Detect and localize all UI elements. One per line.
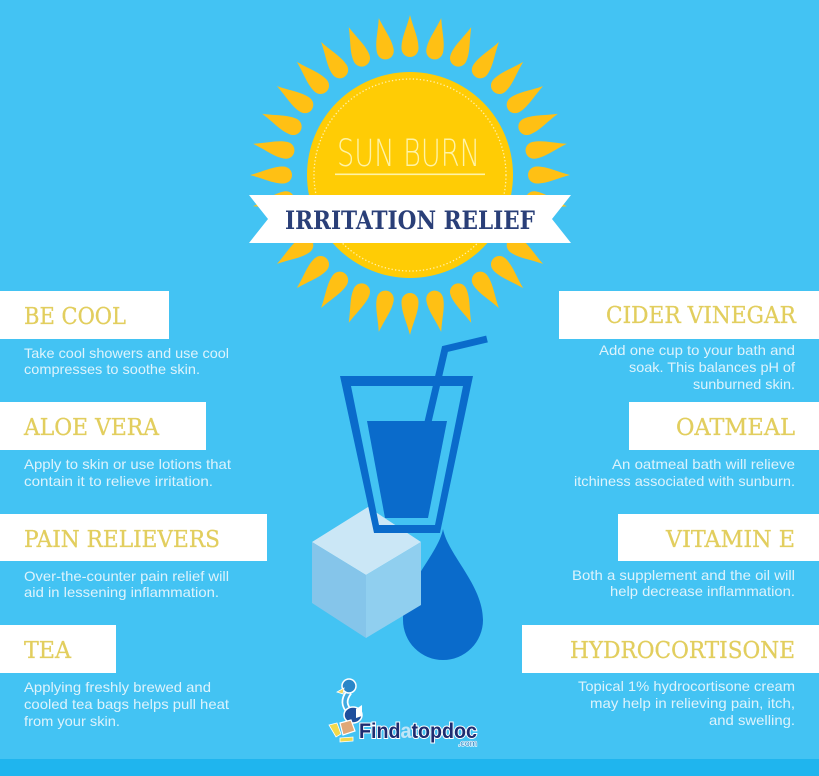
panel: hydrocortisone: HYDROCORTISONE (570, 636, 795, 664)
panel: be cool: BE COOL (24, 302, 126, 330)
panel: vitamin e (572, 514, 819, 599)
panel: hydrocortisone (522, 625, 819, 728)
liquid (367, 421, 447, 518)
panel: be cool: compresses to soothe skin. (24, 361, 200, 377)
icon: sun (250, 15, 570, 335)
panel: vitamin e: help decrease inflammation. (610, 583, 795, 599)
banner: irritation relief (249, 195, 571, 243)
panel: tea: cooled tea bags helps pull heat (24, 696, 229, 712)
panel: aloe vera: Apply to skin or use lotions that (24, 456, 231, 472)
panel: aloe vera: contain it to relieve irritation. (24, 473, 213, 489)
panel: cider vinegar: CIDER VINEGAR (606, 301, 797, 329)
title: sun burn: SUN BURN (337, 132, 480, 175)
panel: cider vinegar: sunburned skin. (693, 376, 795, 392)
panel: oatmeal: OATMEAL (676, 413, 795, 441)
panel: cider vinegar: Add one cup to your bath and (599, 342, 795, 358)
panel: vitamin e: VITAMIN E (665, 525, 795, 553)
icon: water drop (403, 529, 483, 660)
panel: aloe vera (0, 402, 231, 489)
logo: findatopdoc (329, 679, 477, 748)
panel: tea: from your skin. (24, 713, 120, 729)
panel: tea (0, 625, 229, 729)
icon: duck mascot (329, 679, 362, 742)
panel: pain relievers: aid in lessening inflammation. (24, 584, 219, 600)
logo: findatopdoc: Findatopdoc (359, 720, 477, 743)
panel: hydrocortisone: and swelling. (709, 712, 795, 728)
panel: hydrocortisone: Topical 1% hydrocortisone cream (578, 678, 795, 694)
panel: cider vinegar (559, 291, 819, 392)
panel: vitamin e: Both a supplement and the oil will (572, 567, 795, 583)
panel: pain relievers: PAIN RELIEVERS (24, 525, 220, 553)
panel: oatmeal (574, 402, 819, 489)
panel: cider vinegar: soak. This balances pH of (629, 359, 795, 375)
panel: aloe vera: ALOE VERA (23, 413, 160, 441)
panel: hydrocortisone: may help in relieving pain, itch, (590, 695, 795, 711)
panel: tea: TEA (24, 636, 72, 664)
icon: ice cube (312, 507, 421, 638)
logo: findatopdoc: .com (458, 739, 477, 748)
panel: pain relievers (0, 514, 267, 600)
sun disc (307, 72, 513, 278)
panel: pain relievers: Over-the-counter pain relief will (24, 568, 229, 584)
straw (428, 339, 487, 422)
panel: be cool (0, 291, 229, 377)
glass outline (340, 376, 473, 533)
panel: oatmeal: An oatmeal bath will relieve (612, 456, 795, 472)
icon: glass with straw (340, 339, 487, 533)
dotted ring (314, 79, 506, 271)
sun rays (250, 15, 570, 335)
panel: oatmeal: itchiness associated with sunburn. (574, 473, 795, 489)
banner: irritation relief: IRRITATION RELIEF (285, 206, 535, 235)
panel: tea: Applying freshly brewed and (24, 679, 211, 695)
panel: be cool: Take cool showers and use cool (24, 345, 229, 361)
